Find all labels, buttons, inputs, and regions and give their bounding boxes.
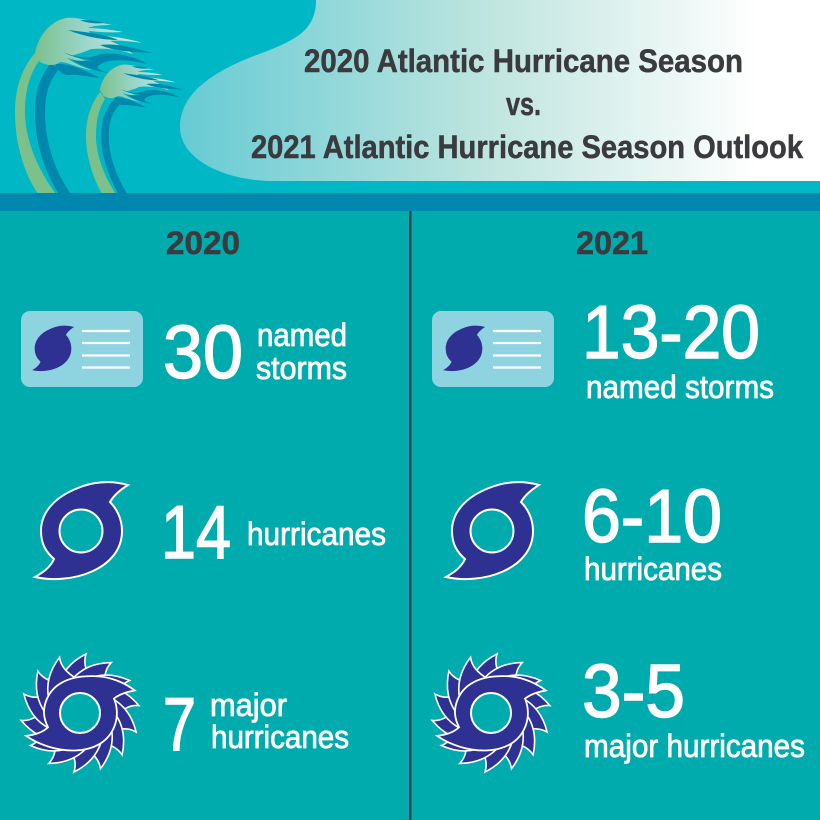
icon: major hurricane <box>429 650 553 776</box>
2021 named storms row <box>432 290 774 405</box>
label: major hurricanes: hurricanes <box>211 719 349 755</box>
2021 hurricanes row <box>446 474 722 587</box>
2020 hurricanes row <box>35 482 386 579</box>
number: 3-5: 3-5 <box>582 649 685 733</box>
label: named storms: storms <box>256 350 347 386</box>
number: 7: 7 <box>163 682 196 766</box>
large palm tree <box>15 18 152 196</box>
title <box>251 43 803 165</box>
blue horizontal band <box>0 193 820 211</box>
label: hurricanes: hurricanes <box>584 551 722 587</box>
number: 30: 30 <box>163 310 243 394</box>
small palm tree <box>86 65 183 196</box>
label: major hurricanes: major <box>210 687 287 723</box>
label: major hurricanes <box>210 687 349 755</box>
label: named storms: named <box>257 317 347 353</box>
title: 2020 Atlantic Hurricane Season <box>304 43 743 79</box>
column heading: 2020: 2020 <box>166 225 240 261</box>
number: 6-10: 6-10 <box>582 474 722 558</box>
column heading: 2021: 2021 <box>576 225 648 261</box>
2020 major hurricanes row <box>18 650 349 776</box>
header sky <box>0 0 820 194</box>
label: hurricanes: hurricanes <box>247 516 386 552</box>
number: 14: 14 <box>161 490 231 574</box>
label: named storms: named storms <box>586 369 774 405</box>
center divider <box>409 211 412 820</box>
palm trees illustration <box>15 18 183 196</box>
icon: storm advisory card <box>21 311 143 387</box>
label: major hurricanes: major hurricanes <box>584 728 805 764</box>
icon: hurricane <box>446 482 539 579</box>
2021 major hurricanes row <box>429 649 805 776</box>
header light gradient shape <box>180 0 820 181</box>
title: vs. <box>506 86 541 122</box>
icon: storm advisory card <box>432 311 554 387</box>
icon: major hurricane <box>18 650 142 776</box>
number: 13-20: 13-20 <box>582 290 760 374</box>
2020 named storms row <box>21 310 347 394</box>
icon: hurricane <box>35 482 128 579</box>
label: named storms <box>256 317 347 386</box>
